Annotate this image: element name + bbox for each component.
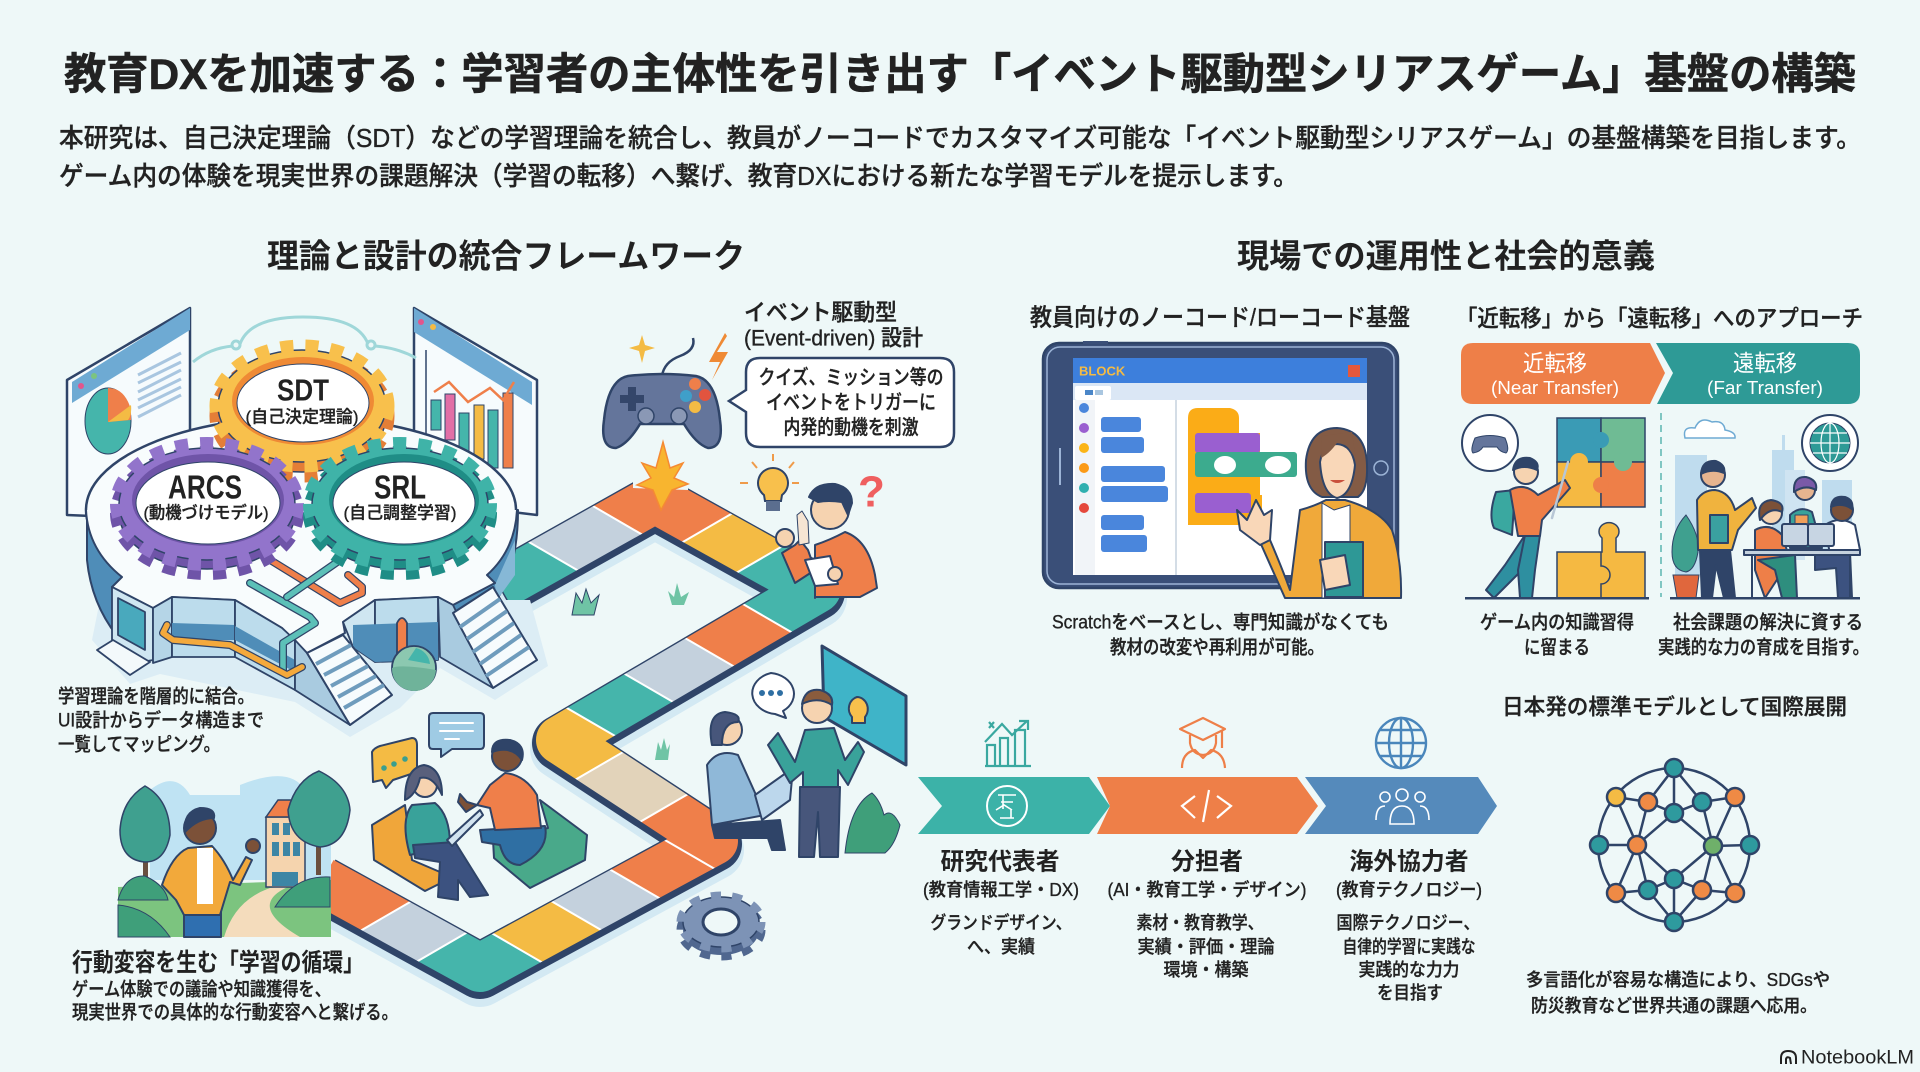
caption: international: 防災教育など世界共通の課題へ応用。 <box>1531 996 1817 1016</box>
gear: ARCS: (動機づけモデル) <box>144 502 268 522</box>
caption: far transfer: 実践的な力の育成を目指す。 <box>1658 636 1869 658</box>
caption: international: 多言語化が容易な構造により、SDGsや <box>1526 969 1830 990</box>
connection lines <box>193 317 416 362</box>
gear: SRL: (自己調整学習) <box>344 504 456 522</box>
icon: graduate <box>1180 718 1225 768</box>
illustration: near transfer <box>1462 415 1649 600</box>
icon: globe <box>1376 718 1426 768</box>
learning text: UI設計からデータ構造まで <box>58 708 264 732</box>
icon: light bulb and question mark <box>740 454 885 516</box>
gear: SDT <box>216 346 388 476</box>
heading: event-driven design: イベント駆動型 <box>744 299 897 325</box>
heading: event-driven design: (Event-driven) 設計 <box>744 326 923 350</box>
logo: NotebookLM: NotebookLM <box>1801 1048 1914 1068</box>
team: research lead: グランドデザイン、 <box>930 912 1072 933</box>
team: co-investigator: 素材・教育教学、 <box>1136 913 1264 933</box>
team: co-investigator: 実績・評価・理論 <box>1138 937 1274 957</box>
people: mentor conversation <box>707 646 906 857</box>
right dashboard window <box>414 308 537 515</box>
team: overseas collaborators: 実践的な力力 <box>1358 960 1460 980</box>
icon: game controller <box>603 333 728 448</box>
data pipes <box>163 558 362 675</box>
callout: event triggers <box>729 358 954 447</box>
caption: far transfer <box>1658 612 1869 658</box>
tablet illustration: BLOCK <box>1079 364 1126 378</box>
gear: ARCS <box>117 444 297 573</box>
callout: event triggers: 内発的動機を刺激 <box>784 416 918 439</box>
icon: light bulb and question mark: ? <box>858 468 885 516</box>
subheading: no-code platform: 教員向けのノーコード/ローコード基盤 <box>1030 304 1410 332</box>
learning loop text: 行動変容を生む「学習の循環」 <box>72 949 364 977</box>
caption: tablet: 教材の改変や再利用が可能。 <box>1110 636 1324 658</box>
caption: international <box>1526 969 1830 1016</box>
caption: near transfer: に留まる <box>1524 636 1590 658</box>
callout: event triggers: クイズ、ミッション等の <box>758 366 944 389</box>
team: research lead: 研究代表者 <box>940 848 1060 876</box>
transfer banner: near: (Near Transfer) <box>1491 378 1619 398</box>
learning loop text: ゲーム体験での議論や知識獲得を、 <box>72 978 331 1000</box>
team: co-investigator: 環境・構築 <box>1164 960 1248 980</box>
gear: SDT: (自己決定理論) <box>246 408 358 426</box>
illustration: far transfer <box>1670 415 1860 600</box>
network globe <box>1590 759 1759 931</box>
learning text <box>58 686 264 756</box>
heading: left section: 理論と設計の統合フレームワーク <box>267 238 745 274</box>
gear: SDT: SDT <box>277 372 329 408</box>
team: overseas collaborators <box>1336 848 1482 1003</box>
divider <box>1660 413 1662 597</box>
team chevron: co-investigator <box>1097 777 1318 834</box>
caption: near transfer <box>1480 612 1634 658</box>
team: co-investigator: (AI・教育工学・デザイン) <box>1108 879 1306 900</box>
heading: event-driven design <box>744 299 923 350</box>
team chevron: research lead <box>918 777 1110 834</box>
caption: tablet: Scratchをベースとし、専門知識がなくても <box>1052 612 1389 634</box>
left dashboard window <box>67 308 190 520</box>
intro text: 本研究は、自己決定理論（SDT）などの学習理論を統合し、教員がノーコードでカスタマイズ可能な「イベント駆動型シリアスゲーム」の基盤構築を目指します。 <box>59 123 1861 153</box>
heading: right section: 現場での運用性と社会的意義 <box>1237 238 1655 274</box>
title: 教育DXを加速する：学習者の主体性を引き出す「イベント駆動型シリアスゲーム」基盤の構築 <box>64 51 1856 99</box>
transfer banner: far: (Far Transfer) <box>1707 378 1823 398</box>
learning text: 学習理論を階層的に結合。 <box>58 686 254 708</box>
learning loop text <box>72 949 398 1024</box>
subheading: transfer approach: 「近転移」から「遠転移」へのアプローチ <box>1456 305 1863 331</box>
transfer banner: far <box>1656 343 1860 404</box>
subheading: international: 日本発の標準モデルとして国際展開 <box>1502 694 1847 720</box>
team: overseas collaborators: を目指す <box>1377 983 1443 1003</box>
team: overseas collaborators: 海外協力者 <box>1350 848 1468 876</box>
person: teacher <box>1237 428 1401 598</box>
team chevron: overseas collaborators <box>1305 777 1497 834</box>
transfer banner: near: 近転移 <box>1523 350 1587 376</box>
caption: near transfer: ゲーム内の知識習得 <box>1480 612 1634 634</box>
team: overseas collaborators: (教育テクノロジー) <box>1336 880 1482 900</box>
gear: SRL <box>310 444 490 573</box>
icon: plant <box>845 793 900 853</box>
team: research lead: (教育情報工学・DX) <box>923 880 1079 900</box>
icon: spark on track <box>637 442 688 510</box>
learning loop text: 現実世界での具体的な行動変容へと繋げる。 <box>72 1002 398 1024</box>
icon: small gear <box>681 896 761 956</box>
gear: SRL: SRL <box>374 468 426 506</box>
icon: grass tufts <box>572 583 689 760</box>
team: research lead: へ、実績 <box>967 937 1035 957</box>
board game track <box>331 482 847 1007</box>
caption: far transfer: 社会課題の解決に資する <box>1673 612 1863 634</box>
tablet illustration <box>1043 341 1398 588</box>
transfer banner: far: 遠転移 <box>1733 350 1797 376</box>
stairs <box>307 587 537 725</box>
caption: tablet <box>1052 612 1389 658</box>
platform lower blocks <box>97 587 493 725</box>
transfer banner: near <box>1461 343 1665 404</box>
team: overseas collaborators: 国際テクノロジー、 <box>1336 913 1480 933</box>
platform <box>86 417 548 737</box>
team: co-investigator: 分担者 <box>1171 848 1243 876</box>
team: overseas collaborators: 自律的学習に実践な <box>1342 937 1476 957</box>
icon: growth chart <box>985 721 1031 766</box>
team: co-investigator <box>1108 848 1306 980</box>
gear: ARCS: ARCS <box>168 468 242 506</box>
learning text: 一覧してマッピング。 <box>58 734 220 756</box>
callout: event triggers: イベントをトリガーに <box>766 391 936 414</box>
intro text: ゲーム内の体験を現実世界の課題解決（学習の転移）へ繋げ、教育DXにおける新たな学習モデルを提示します。 <box>59 161 1298 191</box>
person: reading learner <box>776 484 877 598</box>
scene: real-world action <box>118 771 350 937</box>
team: research lead <box>923 848 1079 957</box>
people: seated discussion <box>372 713 587 900</box>
intro text <box>59 123 1861 191</box>
